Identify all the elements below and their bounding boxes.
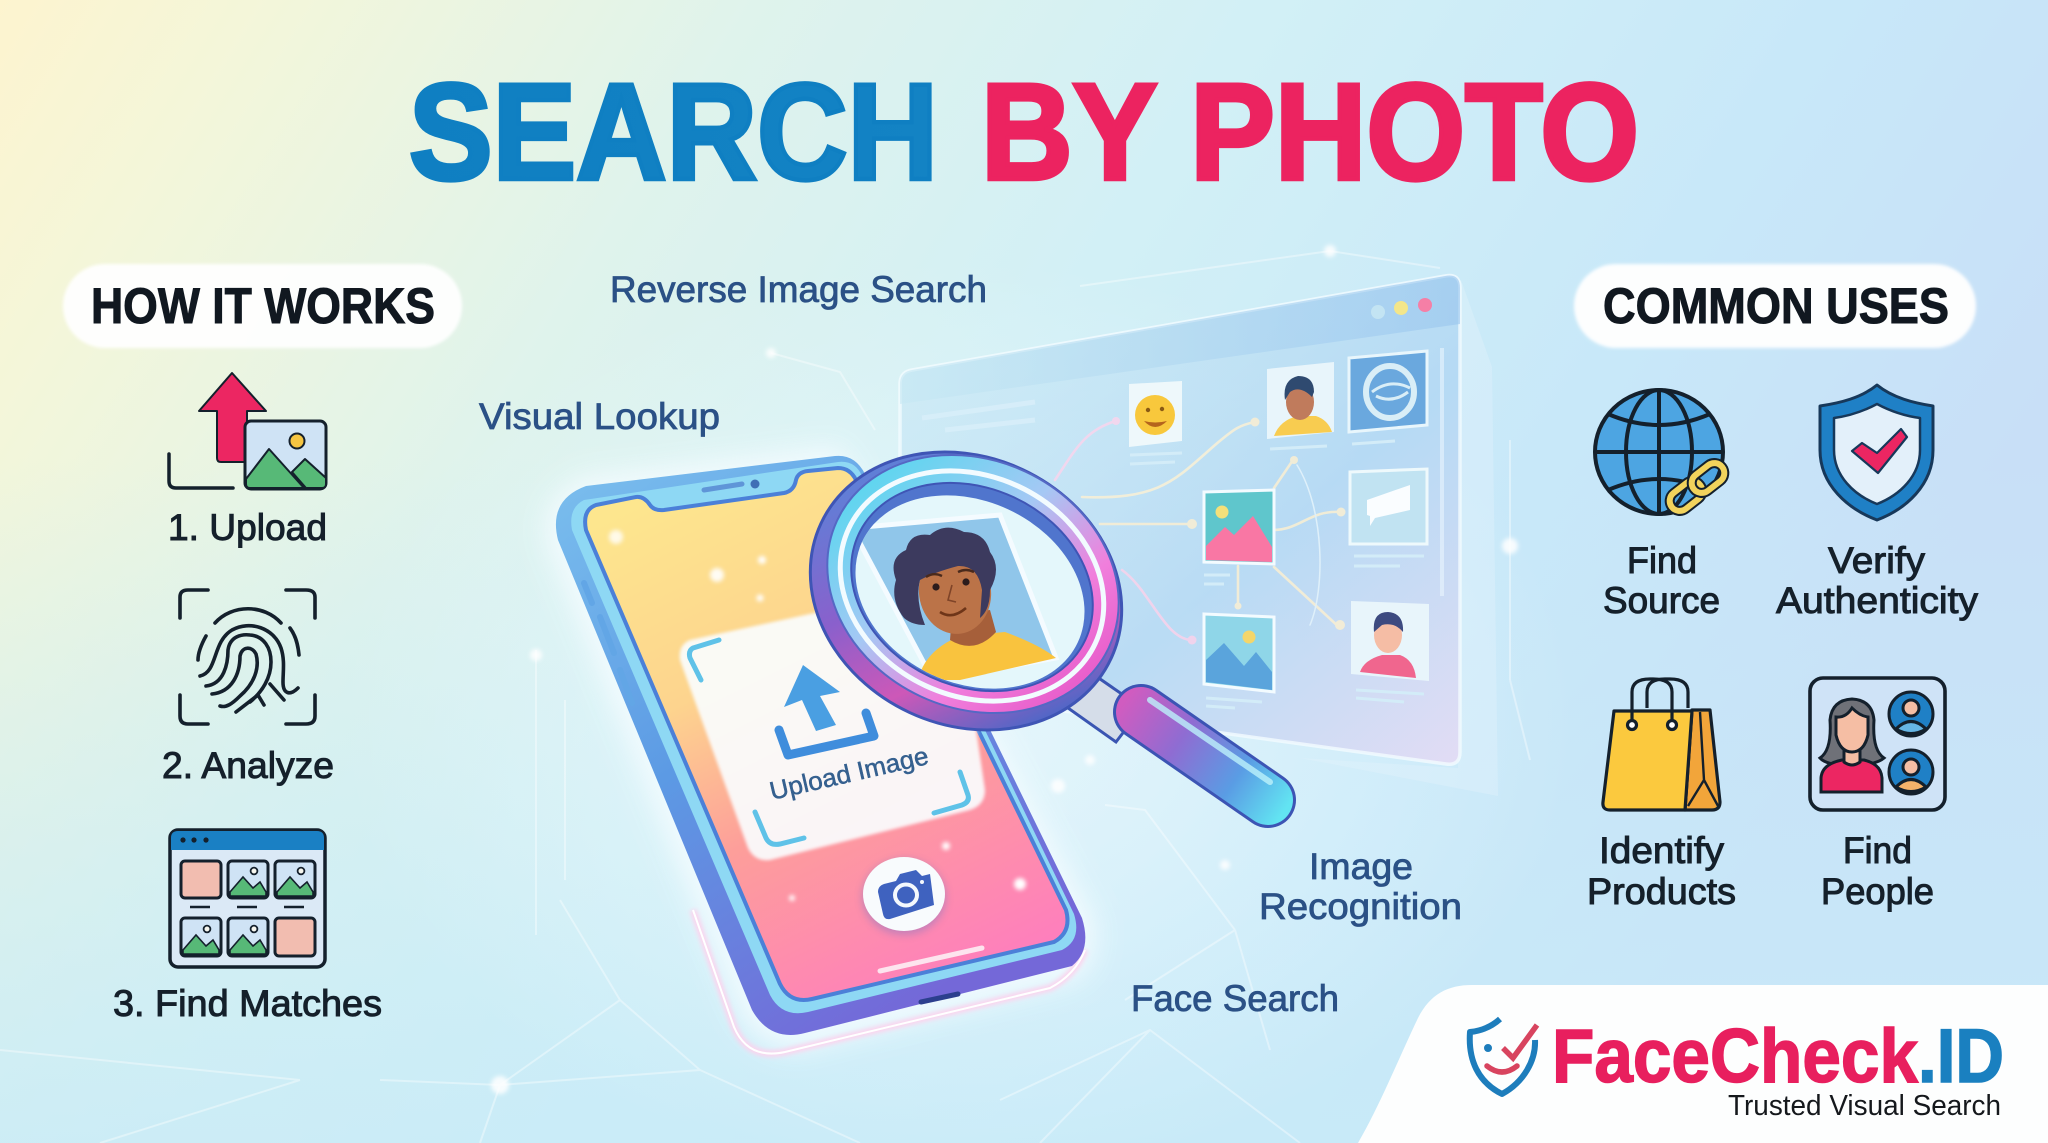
label: verify authenticity: Verify	[1828, 540, 1926, 581]
phone glow	[545, 446, 1096, 1050]
icon: upload	[169, 373, 326, 489]
phone body	[556, 456, 1085, 1035]
upload arrow icon	[784, 665, 840, 731]
screen sparkles	[609, 530, 1026, 901]
window dots	[1371, 298, 1432, 319]
floating browser results panel	[900, 276, 1498, 796]
title: SEARCH	[409, 56, 938, 209]
label: find people	[1821, 830, 1934, 912]
connector lines	[1055, 417, 1346, 644]
result: blue badge	[1349, 351, 1427, 444]
lens glass with portrait	[856, 495, 1084, 689]
label: find people: Find	[1843, 830, 1912, 871]
label: reverse image search: Reverse Image Search	[610, 269, 987, 310]
label: verify authenticity	[1776, 540, 1979, 621]
icon: results browser	[170, 830, 325, 967]
background network lines	[0, 245, 1530, 1143]
icon: globe with chain link	[1595, 390, 1728, 515]
home bar	[880, 948, 982, 971]
step label: find matches: 3. Find Matches	[113, 983, 382, 1024]
scan brackets	[689, 640, 968, 844]
icon: people card	[1810, 678, 1945, 810]
label: find people: People	[1821, 871, 1934, 912]
heading pill: how it works: HOW IT WORKS	[91, 278, 435, 334]
phone with upload screen	[545, 446, 1096, 1054]
label: image recognition: Image	[1309, 846, 1413, 887]
result: person woman	[1351, 601, 1429, 702]
upload card	[680, 589, 985, 860]
notch speaker and camera	[704, 480, 760, 490]
result: smiley	[1129, 381, 1182, 464]
label: identify products: Products	[1587, 871, 1736, 912]
label: verify authenticity: Authenticity	[1776, 580, 1979, 621]
panel: how it works	[63, 264, 462, 1024]
footer brand panel	[1358, 985, 2048, 1143]
logo shield	[1470, 1019, 1537, 1094]
handle connector	[1068, 672, 1142, 742]
handle	[1141, 712, 1268, 800]
title	[409, 56, 1639, 209]
panel: common uses	[1574, 264, 1979, 912]
label: image recognition: Recognition	[1259, 886, 1462, 927]
label: visual lookup: Visual Lookup	[479, 396, 720, 437]
label: image recognition	[1259, 846, 1462, 927]
magnifying glass	[764, 402, 1270, 800]
result: person man	[1267, 362, 1334, 449]
icon: fingerprint scan	[180, 590, 315, 724]
result: blue landscape	[1204, 614, 1274, 708]
result: pink landscape	[1204, 490, 1274, 584]
side buttons	[584, 583, 632, 703]
camera button	[862, 857, 946, 935]
label: find source	[1603, 540, 1720, 621]
upload image label: Upload Image	[767, 742, 931, 806]
label: find source: Find	[1627, 540, 1697, 581]
label: identify products	[1587, 830, 1736, 912]
logo wordmark: .ID	[1918, 1014, 2004, 1099]
heading pill: common uses	[1574, 264, 1976, 348]
lens ring	[764, 402, 1168, 780]
step label: upload: 1. Upload	[168, 507, 327, 548]
icon: shopping bag	[1603, 679, 1720, 810]
charging port	[921, 994, 958, 1002]
result: speech bubble	[1350, 469, 1427, 566]
portrait photo	[852, 515, 1056, 680]
heading pill: how it works	[63, 264, 462, 348]
icon: verified shield	[1820, 385, 1933, 520]
logo wordmark: FaceCheck	[1552, 1014, 1919, 1099]
label: find source: Source	[1603, 580, 1720, 621]
step label: analyze: 2. Analyze	[162, 745, 334, 786]
heading pill: common uses: COMMON USES	[1603, 278, 1949, 334]
tagline: Trusted Visual Search	[1728, 1090, 2001, 1122]
title: BY PHOTO	[981, 56, 1639, 209]
phone screen	[585, 468, 1068, 1000]
label: identify products: Identify	[1599, 830, 1725, 871]
label: face search: Face Search	[1131, 978, 1339, 1019]
sidebar lines	[922, 402, 1035, 430]
